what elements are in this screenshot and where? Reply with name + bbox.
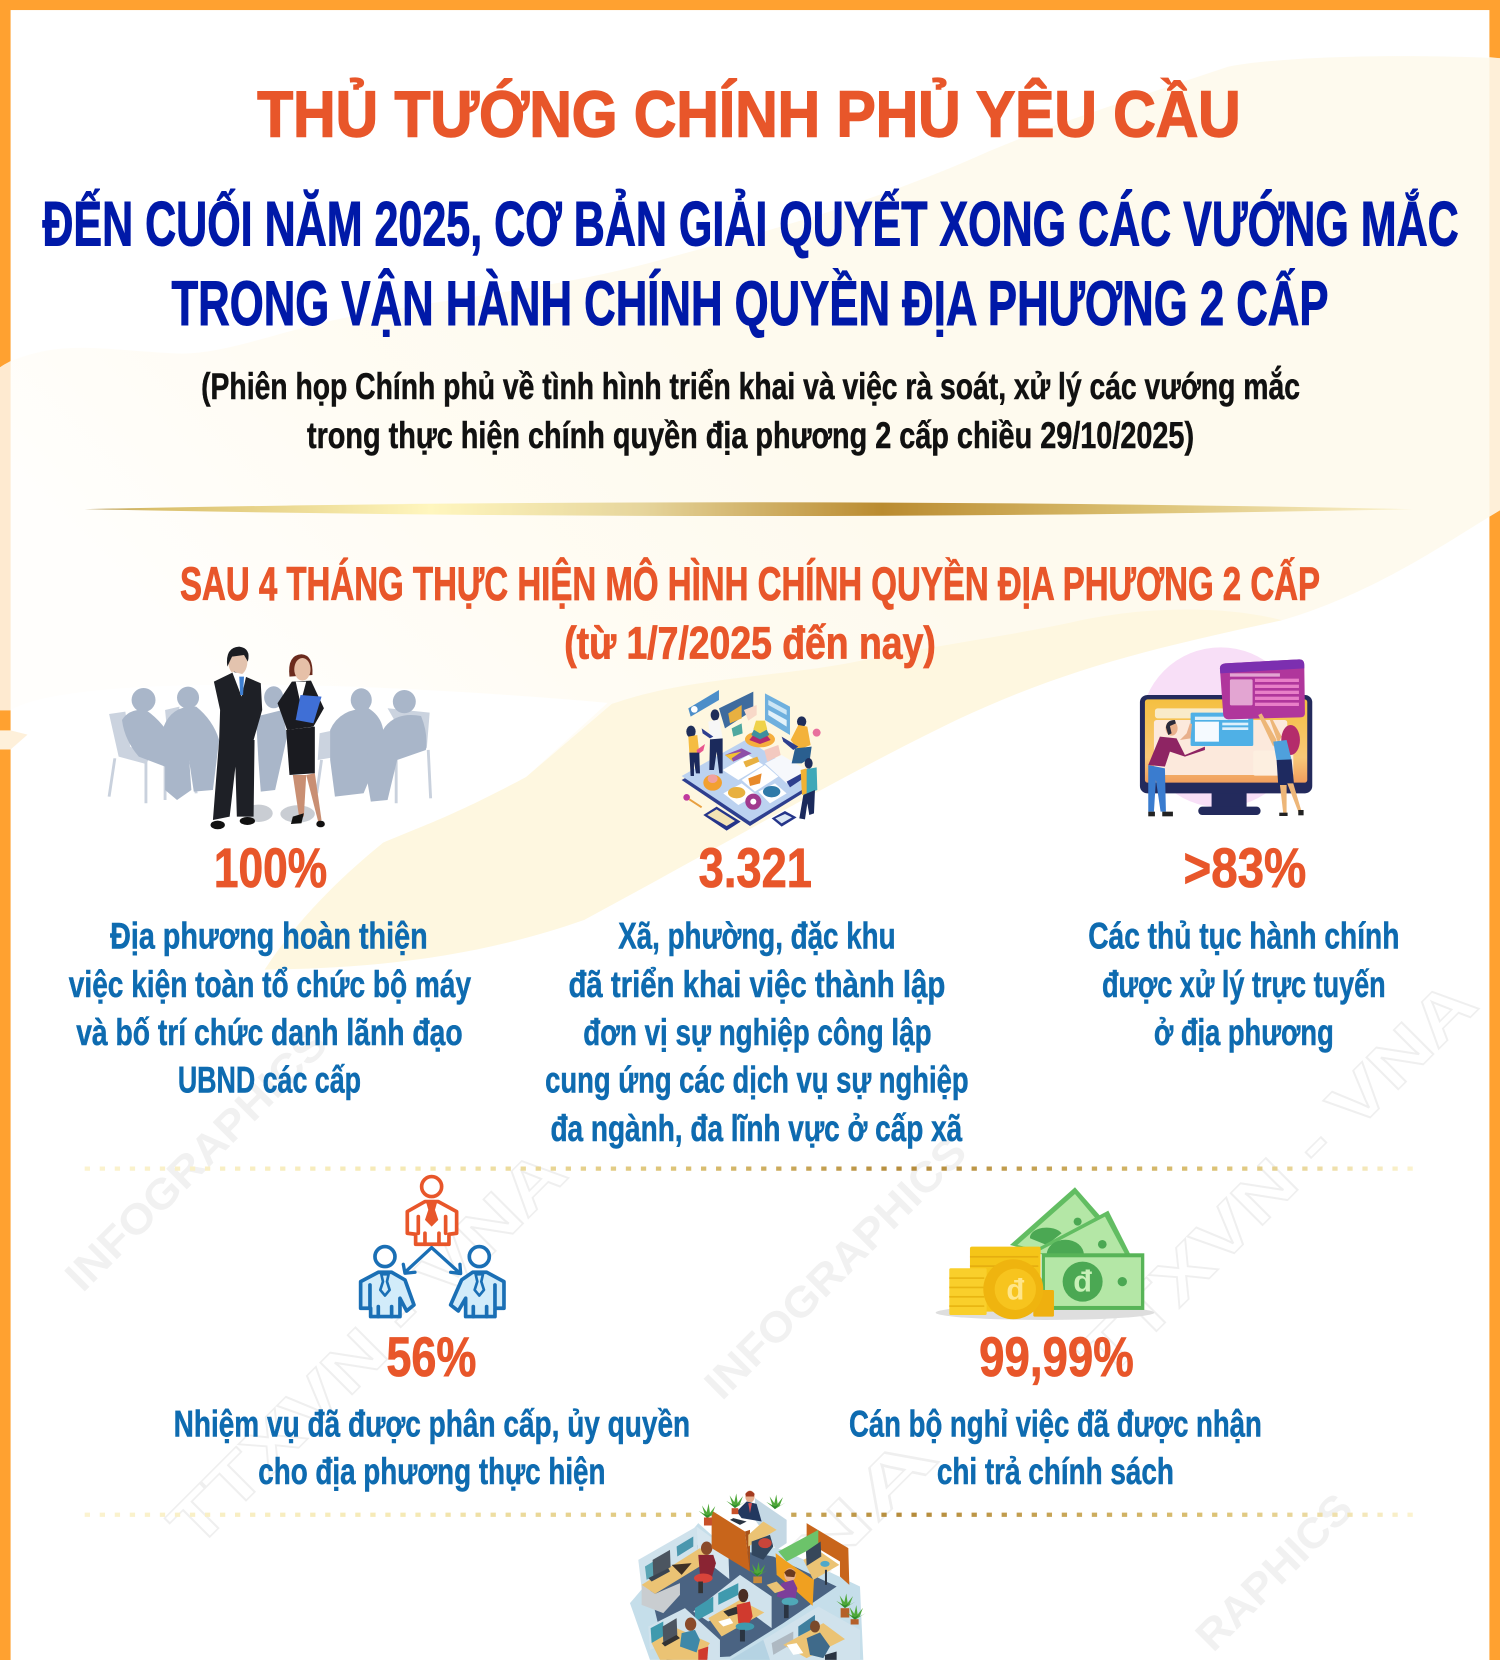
- stat: 3.321: 3.321: [699, 836, 812, 899]
- icon: delegation people: [361, 1177, 504, 1317]
- right person: [451, 1247, 504, 1317]
- icon: money and coins: đ: [1006, 1273, 1024, 1306]
- text: retired staff: [849, 1402, 1262, 1492]
- text: online procedures: ở địa phương: [1154, 1011, 1334, 1053]
- text: communes: [545, 914, 969, 1149]
- text: communes: cung ứng các dịch vụ sự nghiệp: [545, 1058, 969, 1100]
- cubicle left: [638, 1527, 729, 1613]
- stat: 100%: 100%: [214, 836, 327, 899]
- text: local authorities: và bố trí chức danh lãnh đạo: [76, 1011, 463, 1053]
- text: delegated tasks: cho địa phương thực hiện: [258, 1450, 606, 1492]
- watermarks: VNA: [712, 1418, 951, 1657]
- cubicle centre: [693, 1575, 772, 1642]
- text: online procedures: được xử lý trực tuyến: [1102, 963, 1386, 1005]
- woman: [278, 654, 325, 827]
- icon: digital dashboard team: [682, 690, 821, 831]
- background cream shape: [0, 56, 1500, 970]
- dotted divider: [85, 1513, 1413, 1517]
- text: communes: đa ngành, đa lĩnh vực ở cấp xã: [550, 1107, 963, 1149]
- watermarks: TTXVN - VNA: [1064, 965, 1490, 1391]
- section heading: [180, 556, 1320, 668]
- woman: [1258, 713, 1304, 816]
- watermarks: TTXVN - VNA: [154, 1135, 580, 1561]
- dotted divider: [85, 1167, 1413, 1171]
- subtitle: trong thực hiện chính quyền địa phương 2 cấp chiều 29/10/2025): [307, 414, 1194, 456]
- text: delegated tasks: [174, 1402, 690, 1492]
- watermarks: RAPHICS: [1186, 1484, 1362, 1660]
- stat: 56%: 56%: [386, 1325, 476, 1388]
- text: local authorities: việc kiện toàn tổ chức bộ máy: [69, 963, 471, 1005]
- cubicle top: [712, 1491, 787, 1572]
- watermarks: INFOGRAPHICS: [695, 1128, 975, 1408]
- gold divider: [85, 502, 1413, 516]
- cubicle right: [767, 1523, 849, 1618]
- text: local authorities: UBND các cấp: [178, 1058, 361, 1100]
- text: communes: đơn vị sự nghiệp công lập: [583, 1011, 932, 1053]
- cards: [688, 690, 719, 717]
- text: retired staff: Cán bộ nghỉ việc đã được nhận: [849, 1402, 1262, 1444]
- title: THỦ TƯỚNG CHÍNH PHỦ YÊU CẦU: [257, 78, 1241, 151]
- top person: [407, 1177, 457, 1244]
- text: communes: đã triển khai việc thành lập: [568, 963, 945, 1005]
- icon: isometric office: [630, 1491, 866, 1660]
- icon: money and coins: [936, 1187, 1154, 1320]
- stack: [745, 731, 775, 747]
- man: [211, 647, 262, 829]
- text: retired staff: chi trả chính sách: [937, 1450, 1174, 1492]
- platform: [682, 743, 813, 826]
- text: local authorities: Địa phương hoàn thiện: [110, 914, 428, 956]
- devices: [703, 807, 741, 831]
- plants: [699, 1494, 866, 1625]
- left person: [361, 1247, 414, 1317]
- icon: business people meeting: [109, 647, 431, 829]
- watermarks: INFOGRAPHICS: [56, 1020, 336, 1300]
- arrows: [403, 1248, 461, 1274]
- text: delegated tasks: Nhiệm vụ đã được phân cấp, ủy quyền: [174, 1402, 690, 1444]
- stat: 99,99%: 99,99%: [979, 1325, 1134, 1388]
- watermarks: [56, 965, 1490, 1660]
- headline: [42, 189, 1459, 339]
- cubicle lower right: [763, 1607, 860, 1660]
- text: online procedures: [1088, 914, 1399, 1053]
- text: communes: Xã, phường, đặc khu: [618, 914, 896, 956]
- man: [1148, 720, 1205, 816]
- cubicle lower left: [648, 1608, 720, 1660]
- stat: >83%: >83%: [1183, 836, 1306, 899]
- icon: monitor and online services: [1140, 647, 1312, 816]
- section heading: (từ 1/7/2025 đến nay): [564, 617, 936, 668]
- subtitle: [201, 365, 1300, 456]
- people: [686, 709, 817, 819]
- text: local authorities: [69, 914, 471, 1100]
- text: online procedures: Các thủ tục hành chính: [1088, 914, 1399, 956]
- icon: money and coins: đ: [1073, 1265, 1092, 1299]
